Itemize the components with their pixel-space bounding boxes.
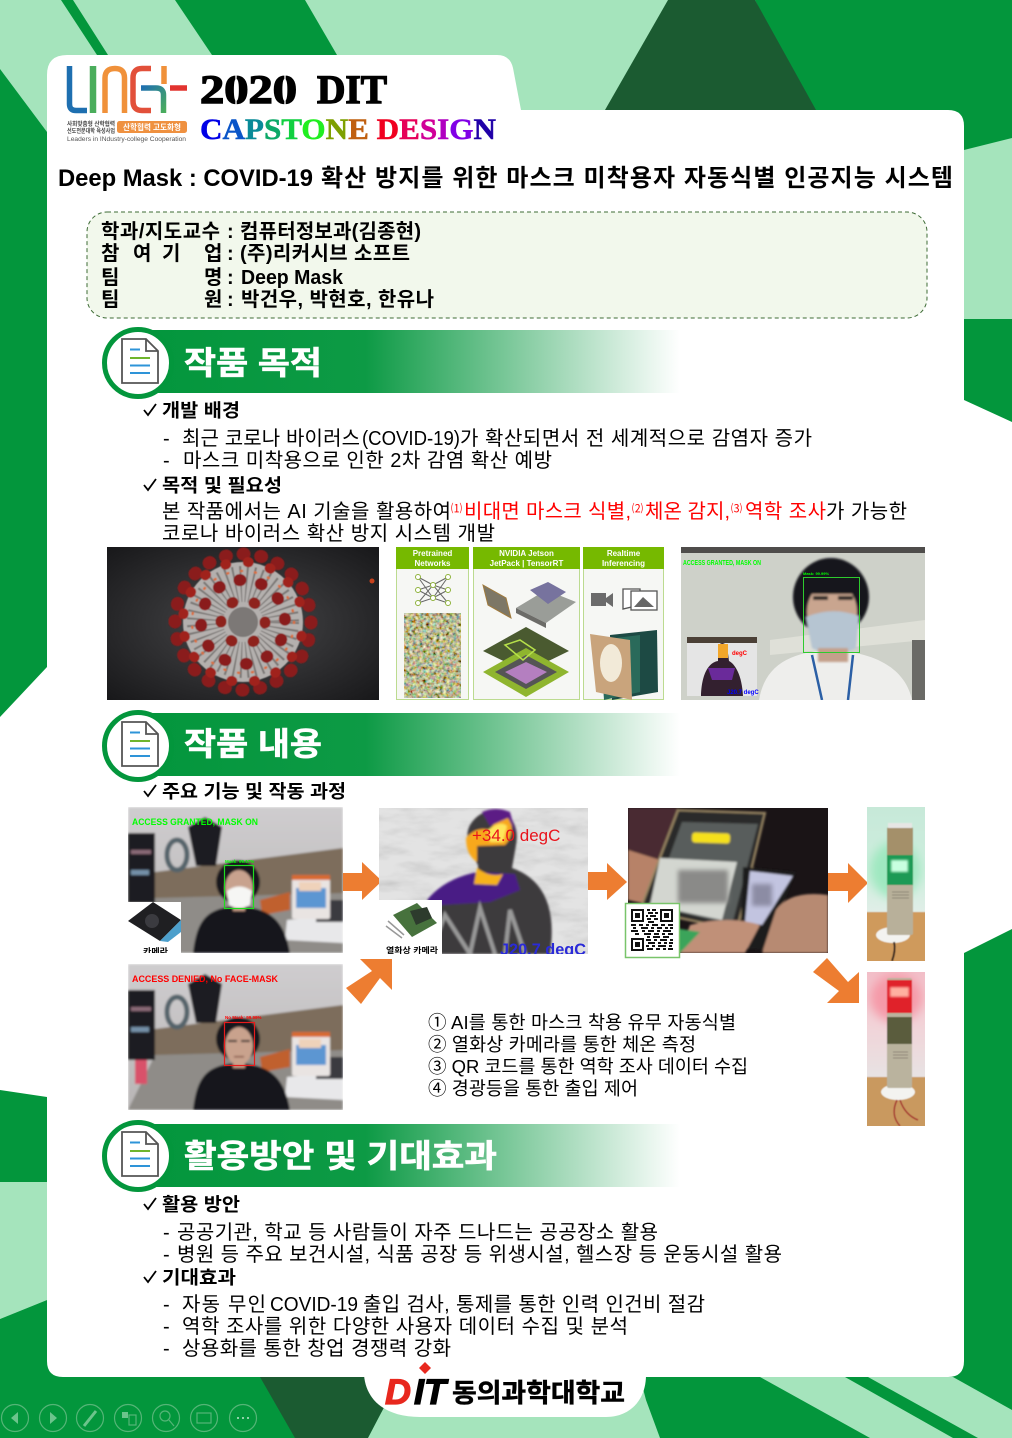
- column: Jetson: JetPack | TensorRT: [490, 559, 563, 568]
- LINC+ logo: [67, 66, 187, 143]
- info: team: [101, 266, 344, 289]
- photo: mask on: ACCESS GRANTED, MASK ON: [132, 817, 258, 827]
- text block: 개발 배경: 가 확산되면서 전 세계적으로 감염자 증가: [460, 427, 812, 450]
- text block: 활용 방안: 활용 방안: [162, 1194, 240, 1215]
- logo caption: 사회맞춤형 산학협력: [67, 120, 115, 128]
- info: members: 박건우, 박현호, 한유나: [241, 288, 434, 311]
- image: coronavirus: [107, 547, 379, 700]
- photo: thermal camera: +34.0 degC: [472, 826, 560, 845]
- info: team: 명: [204, 266, 222, 289]
- image: mask detection screen: [681, 547, 925, 700]
- text block: 목적 및 필요성: [144, 475, 907, 545]
- text block: 활용 방안: 공공기관, 학교 등 사람들이 자주 드나드는 공공장소 활용: [177, 1221, 658, 1244]
- column: Pretrained Networks: Pretrained: [413, 549, 452, 558]
- heading: 2020 DIT: [200, 67, 387, 112]
- DIT university logo: 동의과학대학교: [452, 1378, 625, 1408]
- photo: mask on: [128, 807, 343, 956]
- text block: 기대효과: 자동 무인: [182, 1293, 266, 1316]
- text block: 목적 및 필요성: 코로나 바이러스 확산 방지 시스템 개발: [162, 522, 495, 545]
- inset: camera module: 카메라: [143, 946, 169, 956]
- logo letters: [70, 66, 187, 113]
- icon: document: [122, 339, 158, 383]
- image: mask detection screen: Mask: 99.99%: [803, 571, 829, 576]
- icon: camera: [591, 593, 613, 607]
- photo: QR check-in: [628, 808, 828, 953]
- info: company: :: [227, 243, 234, 265]
- panel: project info: [87, 212, 927, 318]
- text block: 활용 방안: -: [163, 1244, 170, 1266]
- text: 주요 기능 및 작동 과정: 주요 기능 및 작동 과정: [162, 781, 346, 802]
- text block: 목적 및 필요성: 가 가능한: [826, 500, 907, 523]
- image: layered feature maps: [610, 630, 658, 700]
- logo caption: [67, 120, 187, 143]
- icon: document: [122, 722, 158, 766]
- text block: 기대효과: -: [163, 1316, 170, 1338]
- column: Jetson: [473, 547, 580, 700]
- text block: 기대효과: 출입 검사, 통제를 통한 인력 인건비 절감: [363, 1293, 705, 1316]
- info: department: [101, 220, 421, 243]
- icon: pictures: [623, 589, 657, 610]
- text block: 기대효과: -: [163, 1294, 170, 1316]
- photo: no mask: No Mask: 99.99%: [225, 1015, 262, 1020]
- photo: thermal camera: [379, 808, 588, 959]
- arrow: to thermal: [343, 862, 382, 900]
- info: members: [101, 288, 434, 311]
- text block: 개발 배경: 개발 배경: [162, 400, 240, 421]
- section header: 작품 내용: 작품 내용: [184, 726, 322, 762]
- info: company: 기: [162, 242, 180, 265]
- text block: 개발 배경: [144, 400, 812, 472]
- text block: 기대효과: 기대효과: [162, 1267, 236, 1288]
- heading: CAPSTONE DESIGN: CAPSTONE DESIGN: [200, 113, 496, 146]
- inset: thermal sensor: [379, 900, 442, 955]
- inset: thermal preview: degC: [732, 651, 748, 657]
- text block: 기대효과: COVID-19: [270, 1294, 358, 1316]
- column: Realtime Inferencing: Realtime: [607, 549, 641, 558]
- inset: thermal preview: J20.7 degC: [727, 690, 759, 696]
- text block: 기대효과: 상용화를 통한 창업 경쟁력 강화: [182, 1337, 451, 1360]
- photo: red tower light: [867, 972, 925, 1126]
- project title: 확산 방지를 위한 마스크 미착용자 자동식별 인공지능 시스템: [321, 165, 953, 192]
- inset: QR code: [626, 904, 680, 958]
- logo caption: Leaders in INdustry-college Cooperation: [67, 136, 186, 143]
- text block: 목적 및 필요성: ⑶: [731, 502, 742, 515]
- info: company: 업: [204, 242, 222, 265]
- list: key functions: ④ 경광등을 통한 출입 제어: [428, 1078, 638, 1099]
- info: company: (주)리커시브 소프트: [240, 242, 410, 265]
- text block: 개발 배경: 최근 코로나 바이러스: [182, 427, 360, 450]
- text block: 활용 방안: 병원 등 주요 보건시설, 식품 공장 등 위생시설, 헬스장 등 운동시설 활용: [177, 1243, 782, 1266]
- text block: 목적 및 필요성: 목적 및 필요성: [162, 475, 282, 496]
- column: Pretrained Networks: [396, 547, 469, 700]
- column: Realtime Inferencing: Inferencing: [602, 559, 645, 568]
- heading: 2020 DIT: 2020: [200, 67, 297, 112]
- info: members: 원: [204, 288, 222, 311]
- inset: camera module: [128, 902, 181, 956]
- section header: 활용방안 및 기대효과: 활용방안 및 기대효과: [184, 1138, 497, 1174]
- DIT university logo: D: [385, 1373, 411, 1412]
- text block: 기대효과: [144, 1267, 705, 1360]
- list: key functions: ② 열화상 카메라를 통한 체온 측정: [428, 1034, 696, 1055]
- photo: thermal camera: J20.7 degC: [500, 940, 586, 959]
- info: team: :: [227, 267, 234, 289]
- text block: 활용 방안: [144, 1194, 782, 1266]
- DIT university logo: IT: [414, 1373, 449, 1412]
- photo: no mask: [128, 964, 343, 1110]
- list: key functions: [428, 1012, 748, 1099]
- footer toolbar icons: [2, 1404, 256, 1432]
- diagram: NVIDIA Jetson pipeline: [396, 547, 664, 700]
- list: key functions: ③ QR 코드를 통한 역학 조사 데이터 수집: [428, 1056, 748, 1077]
- image: mask detection screen: ACCESS GRANTED, MASK ON: [683, 558, 761, 567]
- text block: 기대효과: 역학 조사를 위한 다양한 사용자 데이터 수집 및 분석: [182, 1315, 628, 1338]
- photo: green tower light: [867, 807, 925, 961]
- text block: 개발 배경: -: [163, 428, 170, 450]
- section header: 작품 내용: [104, 712, 680, 780]
- section header: 활용방안 및 기대효과: [104, 1122, 680, 1190]
- section header: 작품 목적: 작품 목적: [184, 345, 322, 381]
- info: team: Deep Mask: [241, 267, 344, 289]
- column: Jetson: NVIDIA Jetson: [499, 549, 554, 558]
- text block: 목적 및 필요성: ⑴: [451, 502, 462, 515]
- list: key functions: ① AI를 통한 마스크 착용 유무 자동식별: [428, 1012, 736, 1033]
- info: members: 팀: [101, 288, 119, 311]
- column: Pretrained Networks: Networks: [414, 559, 451, 568]
- arrow: to red light: [813, 958, 859, 1003]
- project title: Deep Mask : COVID-19: [58, 165, 313, 192]
- info: company: [101, 242, 410, 265]
- text block: 목적 및 필요성: 역학 조사: [745, 500, 826, 523]
- image mosaic: [404, 613, 461, 698]
- info: company: 여: [133, 242, 151, 265]
- text block: 목적 및 필요성: 본 작품에서는 AI 기술을 활용하여: [162, 500, 451, 523]
- DIT university logo: [364, 1362, 646, 1417]
- icon: neural network: [416, 574, 450, 606]
- text block: 개발 배경: (COVID-19): [362, 428, 460, 450]
- info: team: 팀: [101, 266, 119, 289]
- text block: 목적 및 필요성: ⑵: [632, 502, 643, 515]
- text block: 활용 방안: -: [163, 1222, 170, 1244]
- info: department: 학과/지도교수: [101, 220, 220, 243]
- text block: 기대효과: -: [163, 1338, 170, 1360]
- arrow: no mask to thermal: [346, 959, 392, 1004]
- inset: thermal sensor: 열화상 카메라: [386, 945, 439, 955]
- info: members: :: [227, 289, 234, 311]
- arrow: to QR: [588, 863, 627, 900]
- photo: no mask: ACCESS DENIED, No FACE-MASK: [132, 974, 278, 984]
- section header: 작품 목적: [104, 330, 680, 396]
- column: Realtime Inferencing: [583, 547, 664, 700]
- arrow: to green light: [828, 863, 868, 903]
- photo: mask on: Mask: 99.67%: [225, 859, 254, 864]
- heading: 2020 DIT: DIT: [317, 67, 387, 112]
- info: department: :: [227, 221, 234, 243]
- text block: 목적 및 필요성: 체온 감지,: [645, 500, 730, 523]
- text block: 개발 배경: -: [163, 450, 170, 472]
- info: department: 컴퓨터정보과(김종현): [240, 220, 421, 243]
- text block: 목적 및 필요성: 비대면 마스크 식별,: [464, 500, 631, 523]
- info: company: 참: [101, 242, 119, 265]
- inset: thermal preview: [687, 637, 759, 696]
- logo caption: 선도전문대학 육성사업: [67, 127, 115, 135]
- logo caption: 산학협력 고도화형: [123, 122, 181, 132]
- text block: 개발 배경: 마스크 미착용으로 인한 2차 감염 확산 예방: [183, 449, 552, 472]
- icon: document: [122, 1132, 158, 1176]
